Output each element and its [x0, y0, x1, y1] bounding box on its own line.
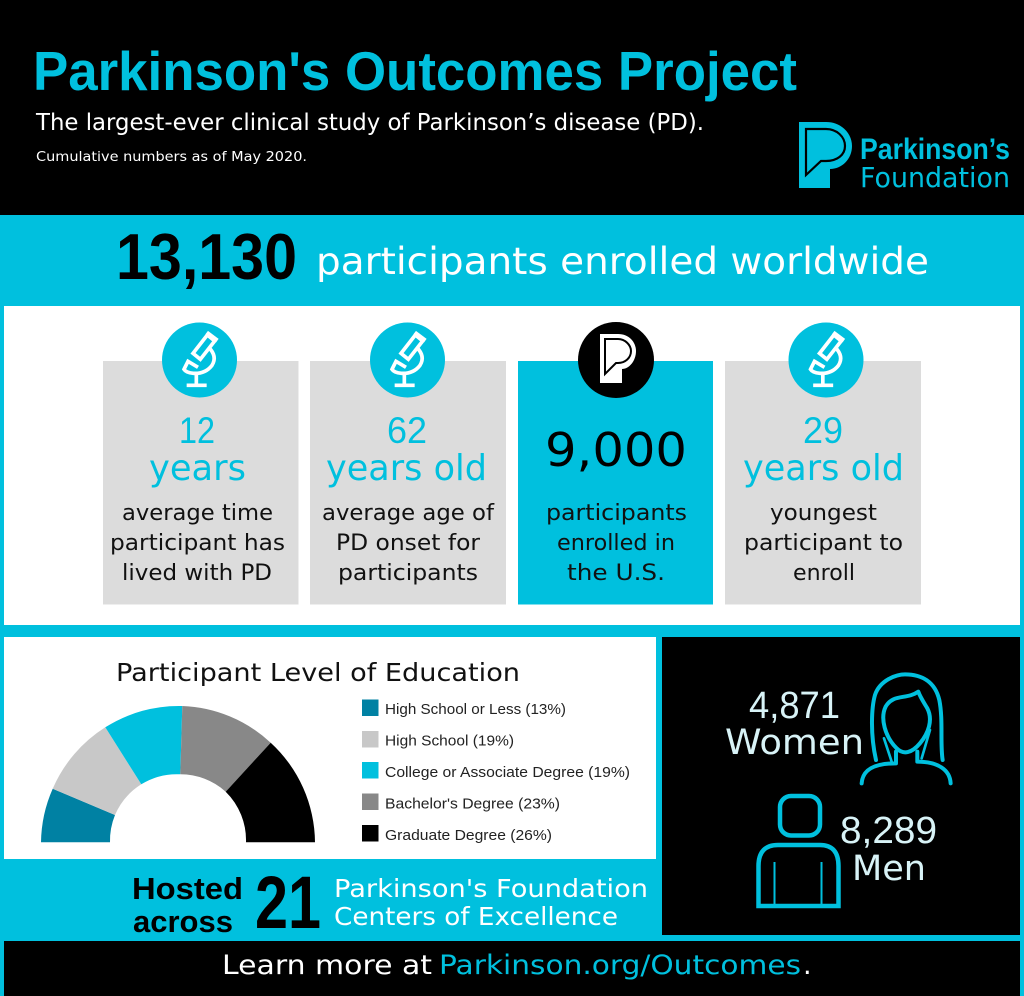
footer: learn more [4, 941, 1020, 996]
card: youngest participant: enroll [793, 561, 855, 586]
icon: Parkinson's P logo [578, 322, 654, 398]
title: Parkinson's Outcomes Project [33, 40, 797, 102]
subtitle: The largest-ever clinical study of Parkinson’s disease (PD). [35, 110, 704, 136]
footer: learn more: Learn more at [222, 950, 432, 981]
footer: learn more: Parkinson.org/Outcomes [439, 950, 801, 981]
date note: Cumulative numbers as of May 2020. [36, 149, 307, 165]
card: average time lived with PD: participant has [110, 531, 285, 556]
card: enrolled in the U.S.: participants [546, 501, 687, 526]
men count: Men [852, 849, 926, 889]
card: average age of onset: years old [326, 448, 487, 489]
card: average age of onset: average age of [322, 501, 495, 526]
callout: centers of excellence: across [133, 904, 233, 939]
legend [362, 700, 630, 844]
icon: woman [862, 674, 951, 783]
callout: centers of excellence [132, 861, 648, 944]
legend: Graduate Degree (26%) [385, 827, 552, 844]
callout: centers of excellence: Centers of Excellence [334, 902, 618, 931]
icon: microscope [370, 322, 445, 398]
card: average age of onset: PD onset for [336, 531, 481, 556]
card: youngest participant: 29 [803, 410, 843, 451]
card: average time lived with PD: average time [122, 501, 273, 526]
men count: 8,289 [840, 810, 937, 852]
card: average age of onset: participants [338, 561, 478, 586]
card: enrolled in the U.S.: 9,000 [545, 423, 687, 477]
icon: microscope [788, 322, 864, 398]
logo: Parkinson's Foundation [799, 122, 1010, 194]
callout: centers of excellence: 21 [255, 861, 321, 944]
headline: participants enrolled: participants enrolled worldwide [316, 240, 929, 283]
logo: Parkinson's Foundation: Parkinson’s [860, 133, 1010, 166]
card: average age of onset [310, 322, 506, 604]
callout: centers of excellence: Hosted [132, 871, 243, 906]
panel: header [0, 0, 1024, 215]
card: average time lived with PD [103, 322, 298, 604]
legend: College or Associate Degree (19%) [385, 764, 630, 781]
card: average time lived with PD: 12 [179, 410, 215, 451]
card: average time lived with PD: years [149, 448, 246, 489]
headline: participants enrolled [116, 220, 929, 293]
icon: man [758, 796, 838, 906]
legend: Bachelor's Degree (23%) [385, 796, 560, 812]
logo: Parkinson's Foundation: Foundation [860, 161, 1010, 194]
card: enrolled in the U.S.: enrolled in [557, 531, 675, 556]
chart heading: Participant Level of Education [116, 658, 520, 687]
legend: High School or Less (13%) [385, 701, 566, 718]
panel: gender breakdown [662, 637, 1020, 935]
women count: 4,871 [749, 685, 840, 727]
men count [840, 810, 937, 889]
card: enrolled in the U.S.: the U.S. [567, 561, 665, 586]
card: average age of onset: 62 [387, 410, 427, 451]
card: average time lived with PD: lived with PD [122, 561, 272, 586]
card: youngest participant [725, 322, 921, 604]
headline: participants enrolled: 13,130 [116, 220, 297, 293]
footer: learn more: . [803, 950, 812, 981]
card: youngest participant: youngest [770, 501, 877, 526]
panel: key statistics [4, 306, 1020, 625]
women count: Women [725, 723, 864, 763]
panel: participant level of education [4, 637, 656, 859]
legend: High School (19%) [385, 732, 514, 750]
card: youngest participant: participant to [744, 531, 903, 556]
icon: microscope [162, 322, 237, 398]
callout: centers of excellence: Parkinson's Foundation [334, 874, 648, 903]
semicircle chart [41, 706, 315, 842]
card: youngest participant: years old [743, 448, 904, 489]
women count [725, 685, 864, 763]
card: enrolled in the U.S. [518, 322, 713, 604]
